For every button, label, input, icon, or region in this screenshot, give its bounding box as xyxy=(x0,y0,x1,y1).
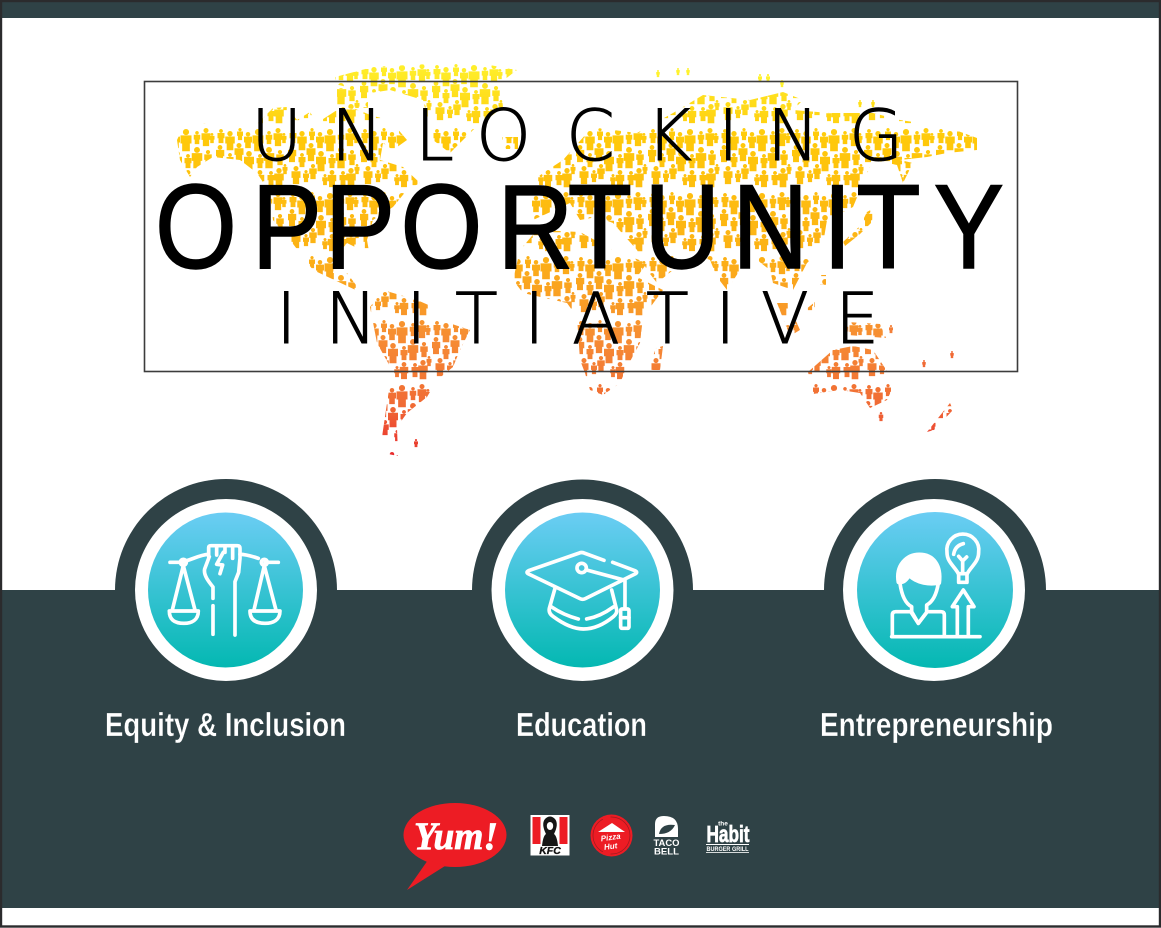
logo: The Habit Burger Grill xyxy=(706,820,750,853)
title: Unlocking: UNLOCKING xyxy=(251,95,903,177)
title box xyxy=(144,82,1018,372)
pillar: equity and inclusion xyxy=(105,479,346,743)
badge: entrepreneurship xyxy=(824,479,1046,681)
logo: Pizza Hut: Hut xyxy=(603,841,618,852)
world map made of people xyxy=(170,55,985,460)
top bar xyxy=(0,0,1161,18)
logo: The Habit Burger Grill: Habit xyxy=(706,821,750,847)
icon: person with light bulb and arrow xyxy=(892,534,980,637)
pillar: education xyxy=(472,480,693,743)
logo: Taco Bell: TACO xyxy=(654,838,680,849)
logo: Taco Bell xyxy=(654,816,680,858)
logo: KFC xyxy=(530,815,570,857)
logo: Pizza Hut xyxy=(590,814,632,856)
label: education: Education xyxy=(516,706,647,743)
pillar: entrepreneurship xyxy=(820,479,1053,743)
logo: Yum: Yum! xyxy=(414,815,498,858)
icon: scales and raised fist xyxy=(169,546,280,635)
brand logos xyxy=(404,803,750,890)
badge: education xyxy=(472,480,693,681)
logo: Taco Bell: BELL xyxy=(654,846,679,858)
dark lower band xyxy=(0,590,1161,908)
title: Opportunity: OPPORTUNITY xyxy=(155,160,1004,293)
logo: Yum xyxy=(404,803,506,890)
logo: The Habit Burger Grill: the xyxy=(718,820,728,828)
logo: KFC: KFC xyxy=(539,845,561,857)
logo: The Habit Burger Grill: BURGER GRILL xyxy=(706,846,749,853)
label: equity and inclusion: Equity & Inclusion xyxy=(105,706,346,743)
label: entrepreneurship: Entrepreneurship xyxy=(820,706,1053,743)
icon: graduation cap xyxy=(527,552,637,629)
logo: Pizza Hut: Pizza xyxy=(600,832,622,843)
badge: equity xyxy=(115,479,337,681)
title: Initiative: INITIATIVE xyxy=(276,278,879,360)
